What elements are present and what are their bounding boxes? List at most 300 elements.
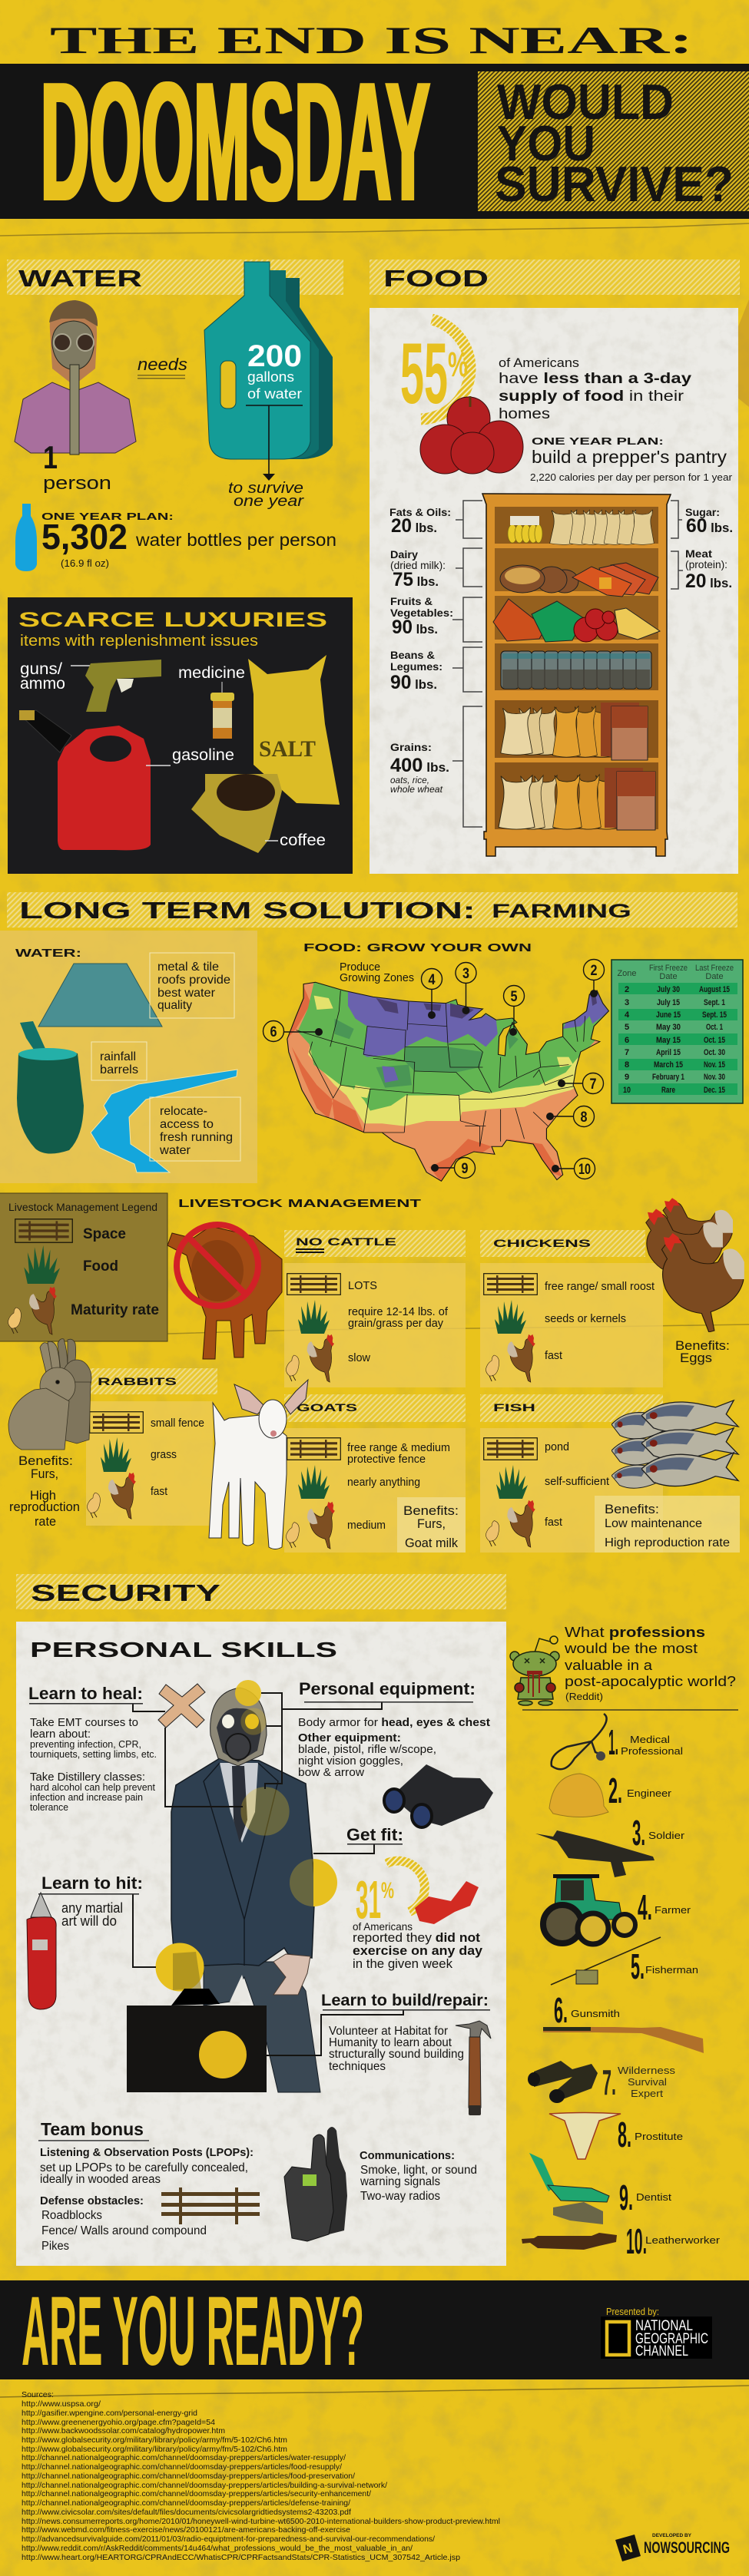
subtitle: would you survive: YOU — [497, 115, 595, 171]
icon: salt sack: SALT — [259, 736, 316, 762]
callout: barrels: rainfall — [100, 1050, 136, 1063]
table: freeze dates by zone: Nov. 15 — [704, 1060, 725, 1070]
table: freeze dates by zone: Zone — [617, 969, 637, 978]
map callouts: zones 2 to 10 — [263, 960, 604, 1179]
rows: chickens: fast — [545, 1349, 563, 1362]
block: learn to hit: Learn to hit: — [41, 1873, 143, 1893]
block: learn to build: Volunteer at Habitat for — [329, 2025, 448, 2038]
stat: 1 person: 1 — [43, 439, 58, 475]
table: freeze dates by zone: June 15 — [656, 1010, 681, 1020]
item 7: wilderness survival expert: 7. — [602, 2062, 616, 2102]
block: learn to hit: any martial — [61, 1900, 123, 1916]
heading: food — [370, 260, 740, 295]
label: dairy: (dried milk): — [390, 559, 446, 571]
block: communications: warning signals — [360, 2175, 440, 2188]
heading: rabbits: RABBITS — [98, 1375, 177, 1387]
pantry shelf — [482, 494, 671, 856]
block: personal equipment: bow & arrow — [298, 1766, 364, 1779]
icon: rabbits — [8, 1339, 91, 1450]
block: personal equipment: night vision goggles, — [298, 1754, 403, 1767]
label: needs: needs — [138, 355, 187, 374]
brackets and quantities — [389, 501, 733, 827]
logo: nowsourcing: N — [621, 2541, 635, 2557]
item 5: fisherman — [551, 1937, 698, 1986]
text: americans stat — [499, 355, 692, 422]
subtitle: would you survive: WOULD — [497, 74, 674, 130]
logo: national geographic channel: NATIONAL — [635, 2318, 693, 2334]
panel: fish — [480, 1394, 663, 1553]
label: fruits and vegetables: Vegetables: — [390, 607, 453, 619]
sources list: http://channel.nationalgeographic.com/channel/doomsday-preppers/articles/water-resupply/ — [22, 2453, 346, 2462]
hatched subtitle box — [478, 71, 749, 211]
rows: fish: fast — [545, 1516, 563, 1529]
table: freeze dates by zone: Sept. 1 — [704, 998, 725, 1007]
stat ring: 55%: % — [448, 345, 468, 384]
item 1: medical professional: Professional — [621, 1745, 683, 1757]
item 4: farmer: Farmer — [655, 1904, 691, 1916]
icon: goat — [209, 1380, 308, 1549]
logo: nowsourcing — [615, 2534, 730, 2561]
block: learn to heal: infection and increase pain — [30, 1791, 143, 1803]
rows: fish — [484, 1438, 610, 1547]
block: personal equipment: Personal equipment: — [299, 1679, 476, 1698]
table: freeze dates by zone: 4 — [625, 1010, 630, 1020]
sources list — [22, 2390, 500, 2562]
callout: goat benefits — [397, 1497, 466, 1553]
label: dairy: 75 lbs. — [393, 569, 439, 590]
sources list: http://www.backwoodssolar.com/catalog/hydropower.htm — [22, 2426, 225, 2435]
rows: no cattle: grain/grass per day — [348, 1317, 443, 1330]
block: learn to heal: preventing infection, CPR, — [30, 1738, 141, 1750]
icon: salt sack — [248, 655, 340, 805]
table: freeze dates by zone: July 15 — [657, 998, 680, 1007]
block: personal equipment: Other equipment: — [298, 1731, 401, 1744]
item 8: prostitute — [549, 2113, 683, 2159]
item 7: wilderness survival expert: Wilderness — [618, 2065, 676, 2076]
stat ring: 55%: 55 — [400, 326, 448, 422]
sources list: http://gasifier.wpengine.com/personal-energy-grid — [22, 2409, 197, 2418]
map callouts: zones 2 to 10: 10 — [578, 1162, 591, 1178]
table: freeze dates by zone: Nov. 30 — [704, 1073, 725, 1082]
item 9: dentist: Dentist — [636, 2191, 671, 2203]
label: guns ammo — [20, 660, 65, 693]
heading: scarce luxuries: SCARCE LUXURIES — [18, 608, 327, 631]
shelf items: jars of beans — [501, 651, 651, 689]
section: security — [16, 1574, 738, 2266]
heading: no cattle: NO CATTLE — [296, 1235, 396, 1248]
block: team bonus: Team bonus — [41, 2119, 144, 2139]
label: medicine: medicine — [178, 664, 245, 682]
label: grains: oats, rice, — [390, 775, 429, 785]
rows: goats: free range & medium — [347, 1441, 450, 1454]
item 1: medical professional — [552, 1714, 683, 1769]
table: freeze dates by zone: Oct. 15 — [704, 1036, 725, 1045]
heading: livestock management: LIVESTOCK MANAGEMENT — [178, 1197, 421, 1210]
icon: night vision goggles — [384, 1764, 493, 1827]
label: gasoline: gasoline — [172, 746, 234, 764]
legend: livestock management — [0, 1193, 167, 1341]
block: learn to heal: tolerance — [30, 1801, 68, 1813]
item 4: farmer: 4. — [638, 1887, 652, 1927]
label: meat: (protein): — [685, 558, 727, 570]
heading: professions question: (Reddit) — [565, 1691, 603, 1702]
block: learn to heal — [28, 1684, 205, 1813]
block: personal equipment — [298, 1679, 490, 1779]
text: one year plan pantry: 2,220 calories per day per person for 1 year — [530, 471, 733, 483]
section: long term solution farming — [0, 892, 743, 1190]
rows: goats — [286, 1438, 450, 1549]
block: learn to heal: Take Distillery classes: — [30, 1771, 145, 1784]
item 2: engineer: 2. — [608, 1771, 622, 1810]
rows: no cattle: LOTS — [348, 1279, 377, 1292]
panel: no cattle — [284, 1230, 466, 1387]
item 1: medical professional: Medical — [630, 1734, 670, 1745]
callout: roofs: metal & tile — [157, 961, 219, 974]
logo: national geographic channel — [601, 2306, 712, 2359]
label: fats and oils: 20 lbs. — [391, 515, 437, 537]
sources list: http://news.consumerreports.org/home/2010/01/honeywell-wind-turbine-wt6500-2010-international-builders-show-product-preview.html — [22, 2517, 500, 2526]
text: americans stat: homes — [499, 406, 550, 422]
callout: relocate: access to — [160, 1118, 214, 1131]
map callouts: zones 2 to 10: 3 — [462, 966, 469, 982]
block: get fit: in the given week — [353, 1956, 452, 1971]
item 9: dentist — [529, 2153, 671, 2224]
table: freeze dates by zone: Date — [705, 972, 724, 981]
item 3: soldier: 3. — [632, 1813, 645, 1853]
block: team bonus: Roadblocks — [41, 2209, 102, 2222]
heading: security — [16, 1574, 506, 1609]
item 2: engineer — [549, 1771, 672, 1817]
sources list: http://www.reddit.com/r/AskReddit/comments/14u464/what_professions_would_be_the_most_valuable_in_an/ — [22, 2544, 413, 2553]
icon: water jugs — [204, 262, 333, 481]
label: coffee: coffee — [280, 832, 326, 849]
table: freeze dates by zone: Last Freeze — [695, 964, 734, 973]
block: learn to hit — [27, 1873, 143, 2009]
text: chicken benefits: Benefits: — [675, 1338, 730, 1353]
block: learn to heal: hard alcohol can help prevent — [30, 1781, 155, 1793]
label: produce growing zones — [340, 961, 414, 984]
rows: goats: medium — [347, 1519, 386, 1532]
callout: barrels — [91, 1042, 147, 1080]
heading: water: WATER — [18, 265, 142, 292]
sources list: http://www.heart.org/HEARTORG/CPRAndECC/WhatisCPR/CPRFactsandStats/CPR-Statistics_UCM_307542_Article.jsp — [22, 2553, 460, 2562]
heading: long term solution: FARMING — [492, 901, 631, 922]
shelf items: milk bowls and meat — [500, 563, 658, 597]
table: freeze dates by zone: 6 — [625, 1036, 629, 1045]
block: team bonus — [38, 2119, 254, 2253]
label: produce growing zones: Growing Zones — [340, 971, 414, 984]
heading: food grow your own: FOOD: GROW YOUR OWN — [303, 941, 532, 954]
item 8: prostitute: Prostitute — [635, 2131, 683, 2142]
map callouts: zones 2 to 10: 4 — [429, 972, 436, 988]
block: communications: Smoke, light, or sound — [360, 2164, 477, 2177]
panel: farming water — [0, 931, 257, 1183]
item 5: fisherman: 5. — [631, 1946, 645, 1986]
item 1: medical professional: 1. — [608, 1722, 618, 1762]
heading: professions question: would be the most — [564, 1641, 698, 1656]
connectors — [133, 1693, 403, 2055]
callout: relocate: fresh running — [160, 1131, 233, 1144]
table: freeze dates by zone: Oct. 1 — [706, 1023, 723, 1032]
label: beans and legumes: 90 lbs. — [390, 672, 437, 693]
table: freeze dates by zone: Dec. 15 — [704, 1086, 725, 1095]
text: rabbit benefits: High — [30, 1488, 56, 1503]
shelf items: fruit and vegetables — [493, 599, 660, 642]
sources list: http://channel.nationalgeographic.com/channel/doomsday-preppers/articles/food-resupply/ — [22, 2462, 342, 2472]
callout: roofs: quality — [157, 999, 192, 1012]
shelf items: oil and sugar — [508, 510, 654, 544]
item 6: gunsmith: Gunsmith — [571, 2008, 620, 2019]
heading: water: WATER: — [15, 947, 81, 960]
label: fats and oils: Fats & Oils: — [389, 506, 451, 518]
block: learn to heal: Learn to heal: — [28, 1684, 143, 1703]
label: meat: 20 lbs. — [685, 570, 732, 592]
logo: national geographic channel: Presented by: — [606, 2306, 659, 2317]
icon: red gas can — [19, 710, 151, 850]
icon: two-way radios — [284, 2127, 347, 2241]
table: freeze dates by zone: 10 — [623, 1086, 631, 1095]
heading: professions question — [564, 1625, 736, 1702]
person in gas mask — [15, 300, 136, 455]
icon: hens — [646, 1198, 744, 1332]
heading: goats: GOATS — [297, 1401, 357, 1414]
panel: scarce luxuries — [8, 597, 353, 874]
text: americans stat: have less than a 3-day — [499, 371, 692, 387]
callout: barrels: barrels — [100, 1063, 138, 1076]
label: grains: 400 lbs. — [390, 755, 449, 776]
table: freeze dates by zone: August 15 — [699, 985, 730, 994]
block: team bonus: ideally in wooded areas — [40, 2173, 161, 2186]
panel: food — [370, 260, 740, 874]
item 10: leatherworker: 10. — [626, 2221, 647, 2261]
legend: livestock management: Space — [83, 1226, 126, 1242]
subtitle: would you survive: SURVIVE? — [495, 156, 734, 212]
table: freeze dates by zone — [611, 960, 743, 1103]
block: team bonus: set up LPOPs to be carefully concealed, — [40, 2161, 248, 2174]
rows: rabbits: fast — [151, 1485, 168, 1498]
text: one year plan pantry — [530, 435, 733, 483]
label: fruits and vegetables: 90 lbs. — [392, 617, 438, 638]
label: guns ammo: guns/ — [20, 660, 62, 678]
panel: water — [7, 260, 343, 571]
figure: man in suit — [171, 1688, 320, 2092]
table: freeze dates by zone: May 15 — [656, 1036, 681, 1045]
stat: one year plan bottles: ONE YEAR PLAN: — [41, 511, 174, 522]
stat: one year plan bottles: (16.9 fl oz) — [61, 557, 109, 569]
heading: fish: FISH — [493, 1401, 535, 1414]
sources list: http://www.uspsa.org/ — [22, 2399, 101, 2409]
text: rabbit benefits: Benefits: — [18, 1453, 73, 1468]
callout: goat benefits: Furs, — [417, 1516, 446, 1531]
label: guns ammo: ammo — [20, 675, 65, 693]
table: freeze dates by zone: Oct. 30 — [704, 1048, 725, 1057]
table: freeze dates by zone: March 15 — [654, 1060, 683, 1070]
rows: chickens: free range/ small roost — [545, 1280, 655, 1293]
text: rabbit benefits: reproduction — [9, 1500, 80, 1514]
callout: relocate: relocate- — [160, 1105, 207, 1118]
label: gasoline — [146, 746, 234, 766]
table: freeze dates by zone: April 15 — [656, 1048, 681, 1057]
icon: coffee sack — [191, 774, 282, 853]
block: personal equipment: Body armor for head, eyes & chest — [298, 1716, 490, 1729]
label: sugar — [685, 506, 733, 537]
icon: briefcase — [127, 1989, 267, 2092]
sources list: http://www.civicsolar.com/sites/default/files/documents/civicsolargridtiedsystems2-43203.pdf — [22, 2508, 351, 2517]
table: freeze dates by zone: 3 — [625, 998, 629, 1007]
icon: wooden fence — [161, 2187, 260, 2224]
table: freeze dates by zone: Rare — [661, 1086, 675, 1095]
item 7: wilderness survival expert — [528, 2061, 676, 2103]
title band — [0, 47, 749, 237]
map callouts: zones 2 to 10: 5 — [510, 989, 518, 1005]
item 9: dentist: 9. — [619, 2178, 633, 2217]
map: growing zones — [287, 981, 610, 1182]
callout: goat benefits: Goat milk — [405, 1536, 458, 1550]
shelf items: grains upper — [501, 703, 648, 760]
map callouts: zones 2 to 10: 2 — [590, 963, 598, 979]
block: team bonus: Pikes — [41, 2240, 69, 2253]
label: grains: whole wheat — [390, 784, 443, 795]
white food card — [370, 308, 738, 874]
block: communications: Communications: — [360, 2149, 455, 2162]
label: sugar: Sugar: — [685, 506, 720, 518]
block: learn to build: Humanity to learn about — [329, 2036, 452, 2049]
label: fruits and vegetables — [390, 595, 453, 638]
block: learn to heal: learn about: — [30, 1728, 91, 1741]
heading: professions question: What professions — [565, 1625, 705, 1640]
panel: goats — [284, 1394, 466, 1553]
sources list: http://channel.nationalgeographic.com/channel/doomsday-preppers/articles/building-a-survival-network/ — [22, 2481, 387, 2490]
text: one year plan pantry: ONE YEAR PLAN: — [532, 435, 664, 447]
block: learn to hit: art will do — [61, 1913, 117, 1929]
label: beans and legumes: Legumes: — [390, 660, 442, 673]
rows: rabbits: small fence — [151, 1417, 204, 1430]
panel: chickens — [480, 1230, 663, 1387]
block: learn to build: techniques — [329, 2060, 386, 2073]
block: get fit: exercise on any day — [353, 1943, 483, 1958]
label: produce growing zones: Produce — [340, 961, 380, 974]
block: learn to build — [321, 1992, 491, 2115]
map callouts: zones 2 to 10: 8 — [581, 1109, 587, 1126]
heading: professions question: post-apocalyptic world? — [565, 1674, 736, 1689]
callout: goat benefits: Benefits: — [403, 1503, 459, 1518]
stat: 1 person — [43, 439, 111, 494]
map callouts: zones 2 to 10: 7 — [590, 1076, 596, 1093]
block: team bonus: Defense obstacles: — [40, 2194, 144, 2207]
label: to survive one year: one year — [234, 493, 305, 510]
heading: long term solution — [7, 892, 737, 928]
icon: cow with no sign — [167, 1225, 282, 1359]
heading: professions question: valuable in a — [565, 1658, 653, 1673]
label: beans and legumes — [390, 649, 442, 693]
label: meat — [685, 547, 732, 592]
block: communications: Two-way radios — [360, 2190, 440, 2203]
item 8: prostitute: 8. — [618, 2115, 631, 2154]
block: learn to build: structurally sound building — [329, 2048, 464, 2061]
block: get fit: reported they did not — [353, 1930, 480, 1945]
stat: one year plan bottles: 5,302 — [41, 517, 128, 557]
table: freeze dates by zone: 7 — [625, 1048, 629, 1057]
label: sugar: 60 lbs. — [686, 515, 733, 537]
label: fats and oils — [389, 506, 451, 537]
heading: security: SECURITY — [31, 1579, 220, 1606]
title: the end is near: THE END IS NEAR: — [50, 18, 693, 61]
table: freeze dates by zone: July 30 — [657, 985, 680, 994]
label: fruits and vegetables: Fruits & — [390, 595, 432, 607]
rows: rabbits: grass — [151, 1448, 177, 1461]
icon: apples — [420, 396, 523, 474]
rows: no cattle: slow — [348, 1351, 370, 1364]
table: freeze dates by zone: 9 — [625, 1073, 629, 1082]
table: freeze dates by zone: Sept. 15 — [702, 1010, 727, 1020]
subtitle: would you survive — [495, 74, 734, 212]
section: livestock — [0, 1193, 744, 1553]
icon: reddit alien zombie — [510, 1636, 559, 1705]
sources list: http://channel.nationalgeographic.com/channel/doomsday-preppers/articles/food-preservation/ — [22, 2472, 355, 2481]
logo: national geographic channel: CHANNEL — [635, 2343, 688, 2359]
block: get fit — [346, 1825, 483, 1971]
sources list: http://channel.nationalgeographic.com/channel/doomsday-preppers/articles/defense-training/ — [22, 2498, 350, 2508]
rows: no cattle: require 12-14 lbs. of — [348, 1305, 449, 1318]
heading: long term solution: LONG TERM SOLUTION: — [19, 897, 476, 924]
item 4: farmer — [543, 1874, 691, 1944]
highlight circles — [156, 1680, 337, 1991]
callout: roofs — [150, 953, 234, 1018]
icon: water jugs: 200 — [247, 339, 302, 373]
item 10: leatherworker — [522, 2221, 721, 2261]
sources list: http://advancedsurvivalguide.com/2011/01/03/radio-equiptment-for-preparedness-and-survival-our-recommendations/ — [22, 2535, 435, 2544]
text: chicken benefits: Eggs — [680, 1351, 712, 1365]
item 3: soldier — [535, 1813, 685, 1877]
logo: nowsourcing: DEVELOPED BY — [652, 2534, 691, 2538]
sources list: http://channel.nationalgeographic.com/channel/doomsday-preppers/articles/security-enhancement/ — [22, 2489, 371, 2498]
legend: livestock management: Food — [83, 1258, 118, 1275]
rows: chickens: seeds or kernels — [545, 1312, 626, 1325]
text: rabbit benefits: Furs, — [31, 1467, 58, 1481]
item 5: fisherman: Fisherman — [645, 1964, 698, 1976]
heading: food: FOOD — [383, 265, 489, 292]
map callouts: zones 2 to 10: 9 — [461, 1161, 469, 1177]
text: rabbit benefits — [9, 1453, 80, 1529]
label: to survive one year: to survive — [228, 480, 303, 497]
subheading: items with replenishment issues — [20, 633, 258, 650]
table: freeze dates by zone: First Freeze — [649, 964, 688, 973]
text: one year plan pantry: build a prepper's pantry — [532, 447, 727, 467]
callout: fish benefits: High reproduction rate — [605, 1536, 730, 1549]
item 2: engineer: Engineer — [627, 1787, 672, 1799]
icon: gun — [71, 660, 161, 712]
label: grains — [390, 741, 449, 795]
callout: fish benefits: Benefits: — [605, 1502, 659, 1516]
text: chicken benefits — [675, 1338, 730, 1365]
label: meat: Meat — [685, 547, 712, 560]
stat: 1 person: person — [43, 473, 111, 494]
stat: one year plan bottles — [41, 511, 336, 569]
callout: fish benefits: Low maintenance — [605, 1517, 702, 1530]
heading: no cattle — [296, 1235, 396, 1253]
callout: roofs: best water — [157, 987, 216, 1000]
rows: no cattle — [286, 1274, 449, 1382]
sources list: Sources: — [22, 2390, 54, 2399]
item 7: wilderness survival expert: Expert — [631, 2088, 663, 2099]
rows: goats: protective fence — [347, 1453, 426, 1466]
label: to survive one year — [228, 480, 305, 510]
block: learn to heal: tourniquets, setting limbs, etc. — [30, 1748, 157, 1760]
map callouts: zones 2 to 10: 6 — [270, 1024, 277, 1040]
stat ring: 55% — [400, 319, 470, 422]
shelf items: grains lower — [499, 768, 655, 830]
table: freeze dates by zone: May 30 — [656, 1023, 681, 1032]
